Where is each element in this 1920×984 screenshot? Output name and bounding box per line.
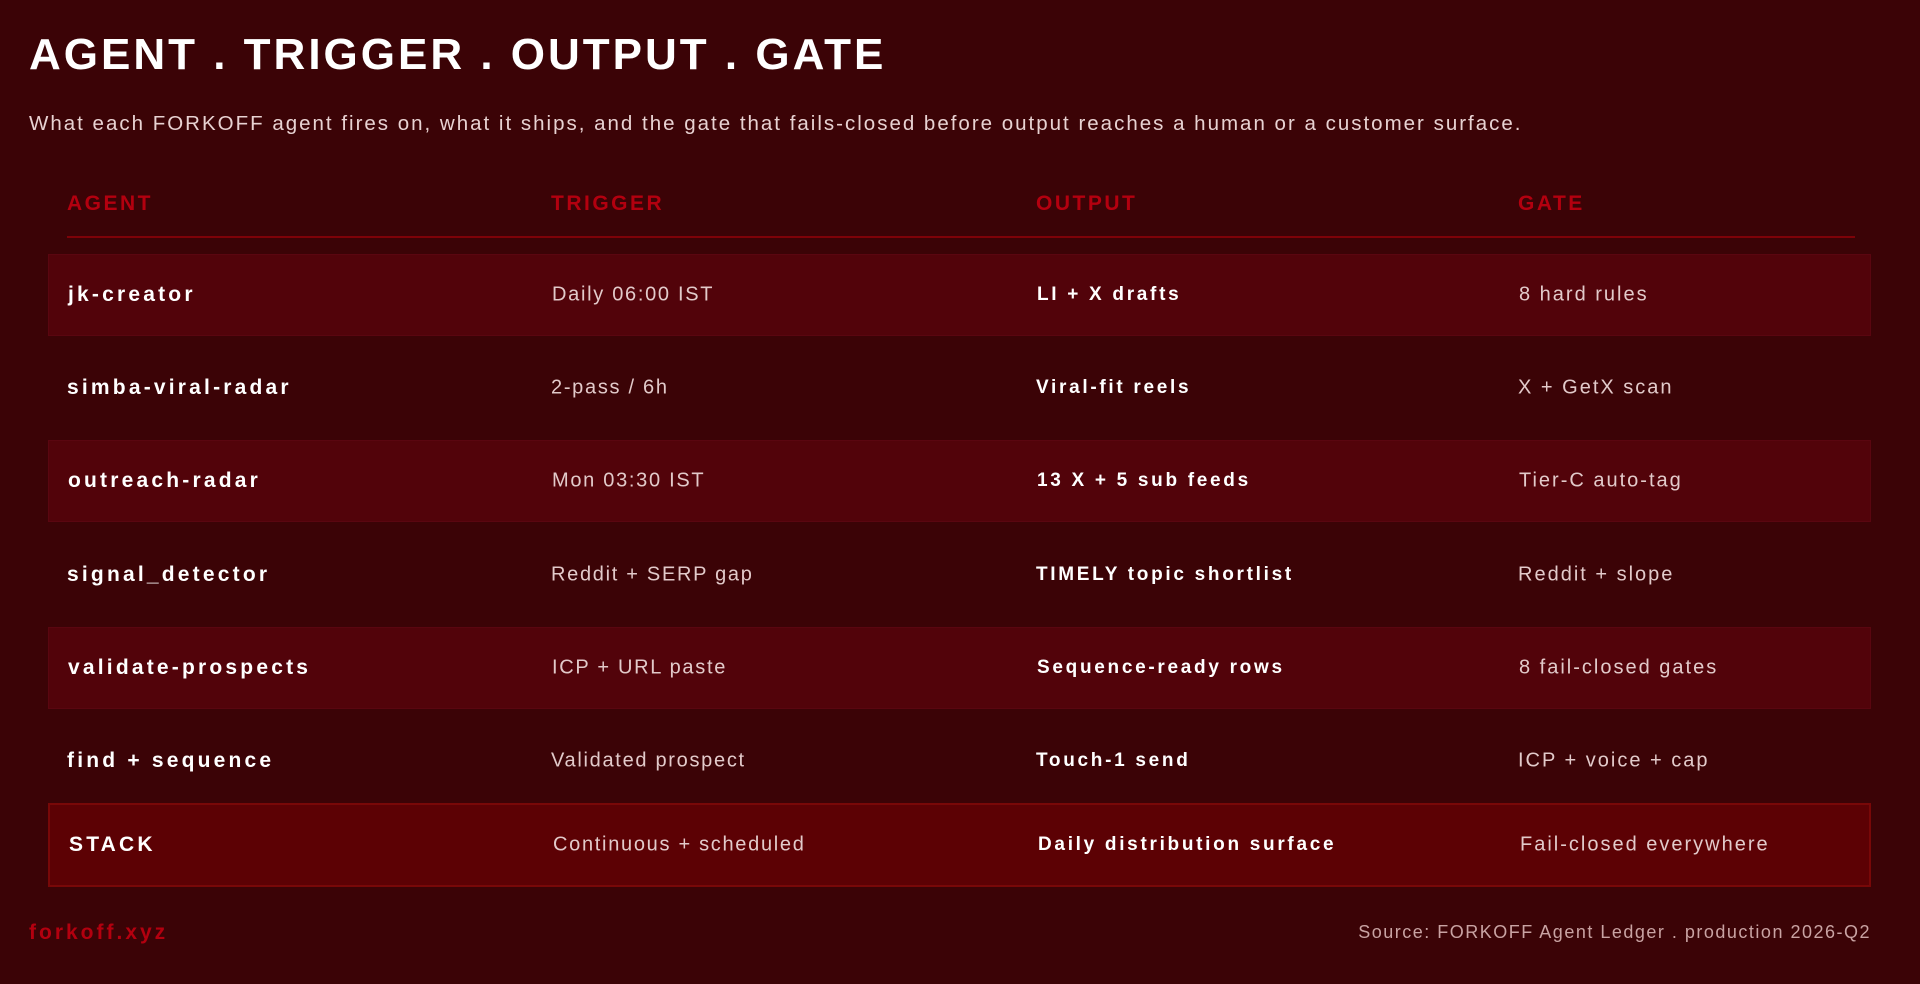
row: signal_detector <box>67 563 1674 586</box>
row: jk-creator: Daily 06:00 IST <box>552 284 714 306</box>
row: outreach-radar: outreach-radar <box>68 469 261 492</box>
row: signal_detector: TIMELY topic shortlist <box>1036 564 1294 585</box>
row: find + sequence: Touch-1 send <box>1036 750 1190 771</box>
row: find + sequence: find + sequence <box>67 749 274 772</box>
row: simba-viral-radar: X + GetX scan <box>1518 376 1674 398</box>
row: stack total: Daily distribution surface <box>1038 834 1336 855</box>
row: find + sequence <box>67 749 1710 772</box>
title: AGENT . TRIGGER . OUTPUT . GATE <box>29 30 886 79</box>
row: signal_detector: Reddit + slope <box>1518 564 1674 586</box>
row: stack total: Continuous + scheduled <box>553 834 806 856</box>
footer source: Source: FORKOFF Agent Ledger . production 2026-Q2 <box>1358 922 1871 942</box>
row: simba-viral-radar: simba-viral-radar <box>67 376 292 399</box>
row: jk-creator: LI + X drafts <box>1037 284 1181 305</box>
row: signal_detector: Reddit + SERP gap <box>551 564 754 586</box>
row: jk-creator: jk-creator <box>68 283 196 306</box>
row: stack total <box>48 803 1871 887</box>
row: jk-creator: 8 hard rules <box>1519 284 1649 306</box>
header: trigger: TRIGGER <box>551 192 664 215</box>
row: outreach-radar: 13 X + 5 sub feeds <box>1037 470 1251 491</box>
row: stack total: STACK <box>69 833 156 856</box>
row: stack total: Fail-closed everywhere <box>1520 834 1770 856</box>
row: validate-prospects <box>48 627 1871 709</box>
row: validate-prospects: ICP + URL paste <box>552 656 727 678</box>
header: agent: AGENT <box>67 192 153 215</box>
row: validate-prospects: 8 fail-closed gates <box>1519 656 1718 678</box>
header: output: OUTPUT <box>1036 192 1137 215</box>
header: gate: GATE <box>1518 192 1585 215</box>
row: outreach-radar <box>48 440 1871 522</box>
row: simba-viral-radar <box>67 376 1674 399</box>
row: signal_detector: signal_detector <box>67 563 270 586</box>
row: outreach-radar: Tier-C auto-tag <box>1519 470 1683 492</box>
row: validate-prospects: Sequence-ready rows <box>1037 657 1285 678</box>
row: find + sequence: ICP + voice + cap <box>1518 750 1710 772</box>
subtitle: What each FORKOFF agent fires on, what it ships, and the gate that fails-closed before output reaches a human or a customer surface. <box>29 112 1522 135</box>
row: simba-viral-radar: Viral-fit reels <box>1036 377 1191 398</box>
footer brand: forkoff.xyz <box>29 921 168 944</box>
row: jk-creator <box>48 254 1871 336</box>
row: find + sequence: Validated prospect <box>551 750 746 772</box>
row: outreach-radar: Mon 03:30 IST <box>552 470 705 492</box>
row: validate-prospects: validate-prospects <box>68 656 311 679</box>
row: simba-viral-radar: 2-pass / 6h <box>551 376 669 398</box>
